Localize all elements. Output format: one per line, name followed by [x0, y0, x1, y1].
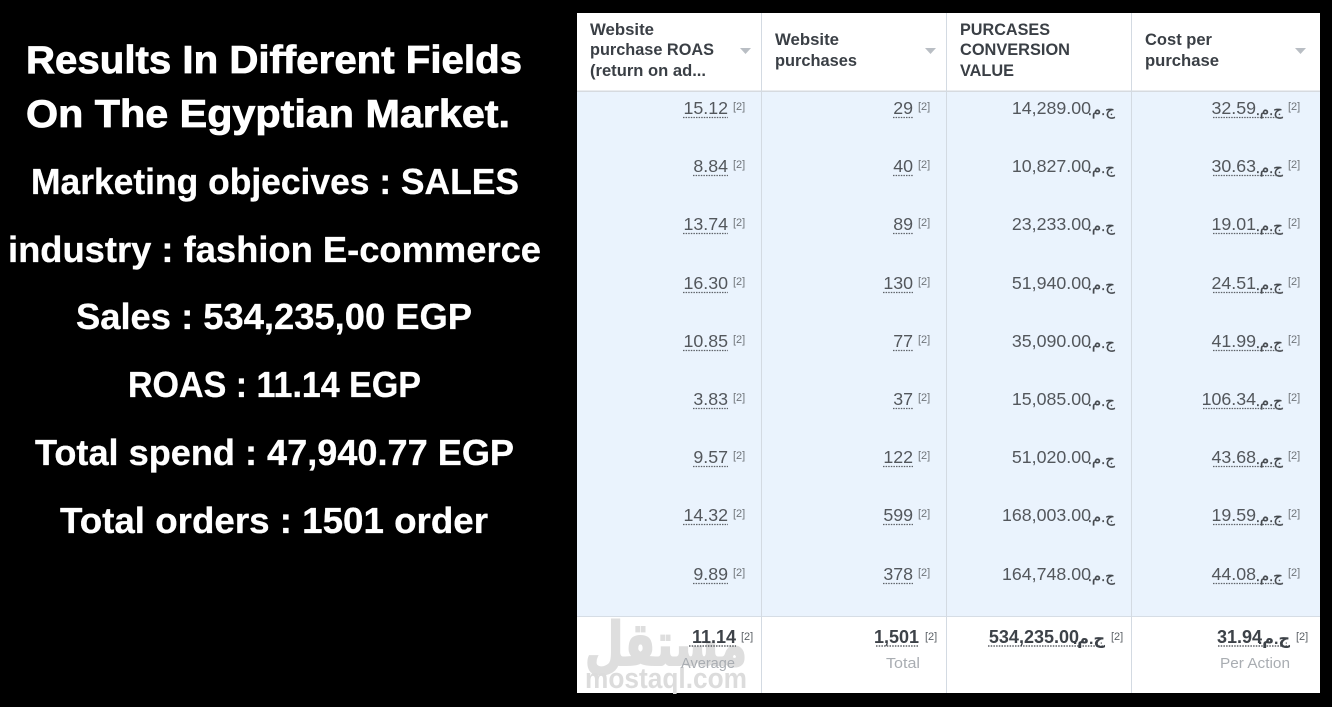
table row 2: [2] — [733, 159, 745, 171]
table row 8: 14.32 — [684, 505, 728, 525]
table row 4: ج.م. — [1256, 277, 1283, 295]
table row 1: ج.م. — [1088, 102, 1115, 120]
table row 3: ج.م. — [1088, 218, 1115, 236]
table row 9: 378 — [883, 564, 913, 584]
table row 3: 19.01 — [1212, 214, 1256, 234]
panel: results table — [577, 13, 1320, 695]
table row 5: [2] — [733, 334, 745, 346]
table row 8: 599 — [883, 505, 913, 525]
total: purchases: [2] — [925, 631, 937, 643]
table row 9: ج.م. — [1088, 568, 1115, 586]
table row 6: ج.م. — [1088, 393, 1115, 411]
table row 9: ج.م. — [1256, 568, 1283, 586]
table row 9: [2] — [1288, 567, 1300, 579]
text: industry: industry : fashion E-commerce — [8, 229, 541, 270]
title: On The Egyptian Market. — [26, 93, 510, 136]
table row 7: [2] — [1288, 450, 1300, 462]
table row 9: 44.08 — [1212, 564, 1256, 584]
table row 2: 30.63 — [1212, 156, 1256, 176]
table row 6: [2] — [918, 392, 930, 404]
table row 8: 19.59 — [1212, 505, 1256, 525]
table row 5: ج.م. — [1256, 335, 1283, 353]
total: purchases — [874, 627, 937, 672]
total: purchases: 1,501 — [874, 627, 919, 647]
total: cost per action — [1217, 627, 1308, 672]
table row 3: [2] — [1288, 217, 1300, 229]
title — [26, 39, 522, 136]
table row 7: [2] — [733, 450, 745, 462]
table row 6: [2] — [1288, 392, 1300, 404]
table row 9: [2] — [918, 567, 930, 579]
table row 3: [2] — [733, 217, 745, 229]
table row 7: 9.57 — [693, 447, 728, 467]
table row 8: [2] — [733, 508, 745, 520]
total: average ROAS: [2] — [741, 631, 753, 643]
watermark: mostaql logo: مستقل — [585, 610, 747, 680]
total: average ROAS: Average — [681, 655, 735, 672]
table row 5: ج.م. — [1088, 335, 1115, 353]
table row 8: 168,003.00 — [1002, 505, 1091, 525]
header: website purchases: purchases — [775, 51, 857, 70]
table row 3: ج.م. — [1256, 218, 1283, 236]
table row 4 — [683, 273, 1300, 295]
text: marketing objective: Marketing objecives : SALES — [31, 161, 519, 202]
table row 6: ج.م. — [1256, 393, 1283, 411]
header: purchases conversion value — [960, 20, 1070, 80]
table row 4: 16.30 — [684, 273, 728, 293]
header: website purchases: Website — [775, 30, 839, 49]
table row 8: [2] — [918, 508, 930, 520]
table row 5: 35,090.00 — [1012, 331, 1091, 351]
table row 7: 43.68 — [1212, 447, 1256, 467]
table totals row — [681, 627, 1308, 672]
table row 8 — [683, 505, 1300, 527]
table row 7: ج.م. — [1088, 451, 1115, 469]
table row 6: 37 — [893, 389, 913, 409]
table row 1: [2] — [918, 101, 930, 113]
table row 7: 51,020.00 — [1012, 447, 1091, 467]
table row 9: 9.89 — [693, 564, 728, 584]
table row 2: 10,827.00 — [1012, 156, 1091, 176]
table row 1 — [683, 98, 1300, 120]
table row 2: 40 — [893, 156, 913, 176]
watermark: mostaql logo — [585, 610, 747, 695]
table row 7: ج.م. — [1256, 451, 1283, 469]
header: cost per purchase: purchase — [1145, 51, 1219, 70]
table row 1: 29 — [893, 98, 913, 118]
table row 3: 13.74 — [684, 214, 728, 234]
table row 9: 164,748.00 — [1002, 564, 1091, 584]
total: conversion value — [988, 627, 1123, 648]
table row 6: [2] — [733, 392, 745, 404]
table row 1: 14,289.00 — [1012, 98, 1091, 118]
table row 4: 24.51 — [1212, 273, 1256, 293]
table row 4: [2] — [1288, 276, 1300, 288]
header: website purchase ROAS — [590, 20, 751, 80]
table row 1: [2] — [733, 101, 745, 113]
table row 6: 3.83 — [693, 389, 728, 409]
text: total spend: Total spend : 47,940.77 EGP — [35, 432, 514, 473]
total: average ROAS — [681, 627, 753, 672]
header: cost per purchase — [1145, 30, 1306, 70]
total: purchases: Total — [886, 655, 920, 672]
panel: campaign summary — [8, 39, 541, 541]
table row 2 — [693, 156, 1300, 178]
total: cost per action: Per Action — [1220, 655, 1290, 672]
table row 4: [2] — [918, 276, 930, 288]
table row 9 — [693, 564, 1300, 586]
text: total orders: Total orders : 1501 order — [60, 500, 488, 541]
text: sales: Sales : 534,235,00 EGP — [76, 296, 472, 337]
table row 8: [2] — [1288, 508, 1300, 520]
table row 3: 23,233.00 — [1012, 214, 1091, 234]
table row 3: [2] — [918, 217, 930, 229]
table row 7 — [693, 447, 1300, 469]
table header row — [590, 20, 1306, 80]
table row 5: 77 — [893, 331, 913, 351]
table row 4: [2] — [733, 276, 745, 288]
table row 5: 10.85 — [684, 331, 728, 351]
total: average ROAS: 11.14 — [692, 627, 736, 647]
table row 3 — [683, 214, 1300, 236]
table row 2: [2] — [918, 159, 930, 171]
header: website purchase ROAS: (return on ad... — [590, 61, 706, 80]
table row 5: [2] — [1288, 334, 1300, 346]
table row 5: 41.99 — [1212, 331, 1256, 351]
table row 5 — [683, 331, 1300, 353]
table row 8: ج.م. — [1088, 509, 1115, 527]
table row 2: 8.84 — [693, 156, 728, 176]
table row 6 — [693, 389, 1300, 411]
header: website purchases — [775, 30, 936, 70]
table row 5: [2] — [918, 334, 930, 346]
total: cost per action: 31.94 — [1217, 627, 1262, 647]
total: cost per action: ج.م. — [1258, 631, 1290, 648]
header: purchases conversion value: CONVERSION — [960, 40, 1070, 59]
table row 3: 89 — [893, 214, 913, 234]
total: conversion value: ج.م. — [1073, 631, 1105, 648]
table row 7: 122 — [883, 447, 913, 467]
header: website purchase ROAS: purchase ROAS — [590, 40, 714, 59]
total: cost per action: [2] — [1296, 631, 1308, 643]
table row 6: 106.34 — [1202, 389, 1256, 409]
total: conversion value: [2] — [1111, 631, 1123, 643]
table row 7: [2] — [918, 450, 930, 462]
table row 1: 15.12 — [684, 98, 728, 118]
text: ROAS: ROAS : 11.14 EGP — [128, 364, 421, 405]
table row 8: ج.م. — [1256, 509, 1283, 527]
header: purchases conversion value: VALUE — [960, 61, 1014, 80]
watermark: mostaql logo: mostaql.com — [585, 663, 747, 695]
table row 2: ج.م. — [1088, 160, 1115, 178]
table row 4: ج.م. — [1088, 277, 1115, 295]
table row 9: [2] — [733, 567, 745, 579]
table row 1: [2] — [1288, 101, 1300, 113]
table row 4: 130 — [883, 273, 913, 293]
table row 2: ج.م. — [1256, 160, 1283, 178]
table row 1: 32.59 — [1212, 98, 1256, 118]
table row 2: [2] — [1288, 159, 1300, 171]
title: Results In Different Fields — [26, 39, 522, 82]
table row 1: ج.م. — [1256, 102, 1283, 120]
header: purchases conversion value: PURCASES — [960, 20, 1050, 39]
header: website purchase ROAS: Website — [590, 20, 654, 39]
total: conversion value: 534,235.00 — [989, 627, 1079, 647]
table row 6: 15,085.00 — [1012, 389, 1091, 409]
header: cost per purchase: Cost per — [1145, 30, 1212, 49]
table row 4: 51,940.00 — [1012, 273, 1091, 293]
